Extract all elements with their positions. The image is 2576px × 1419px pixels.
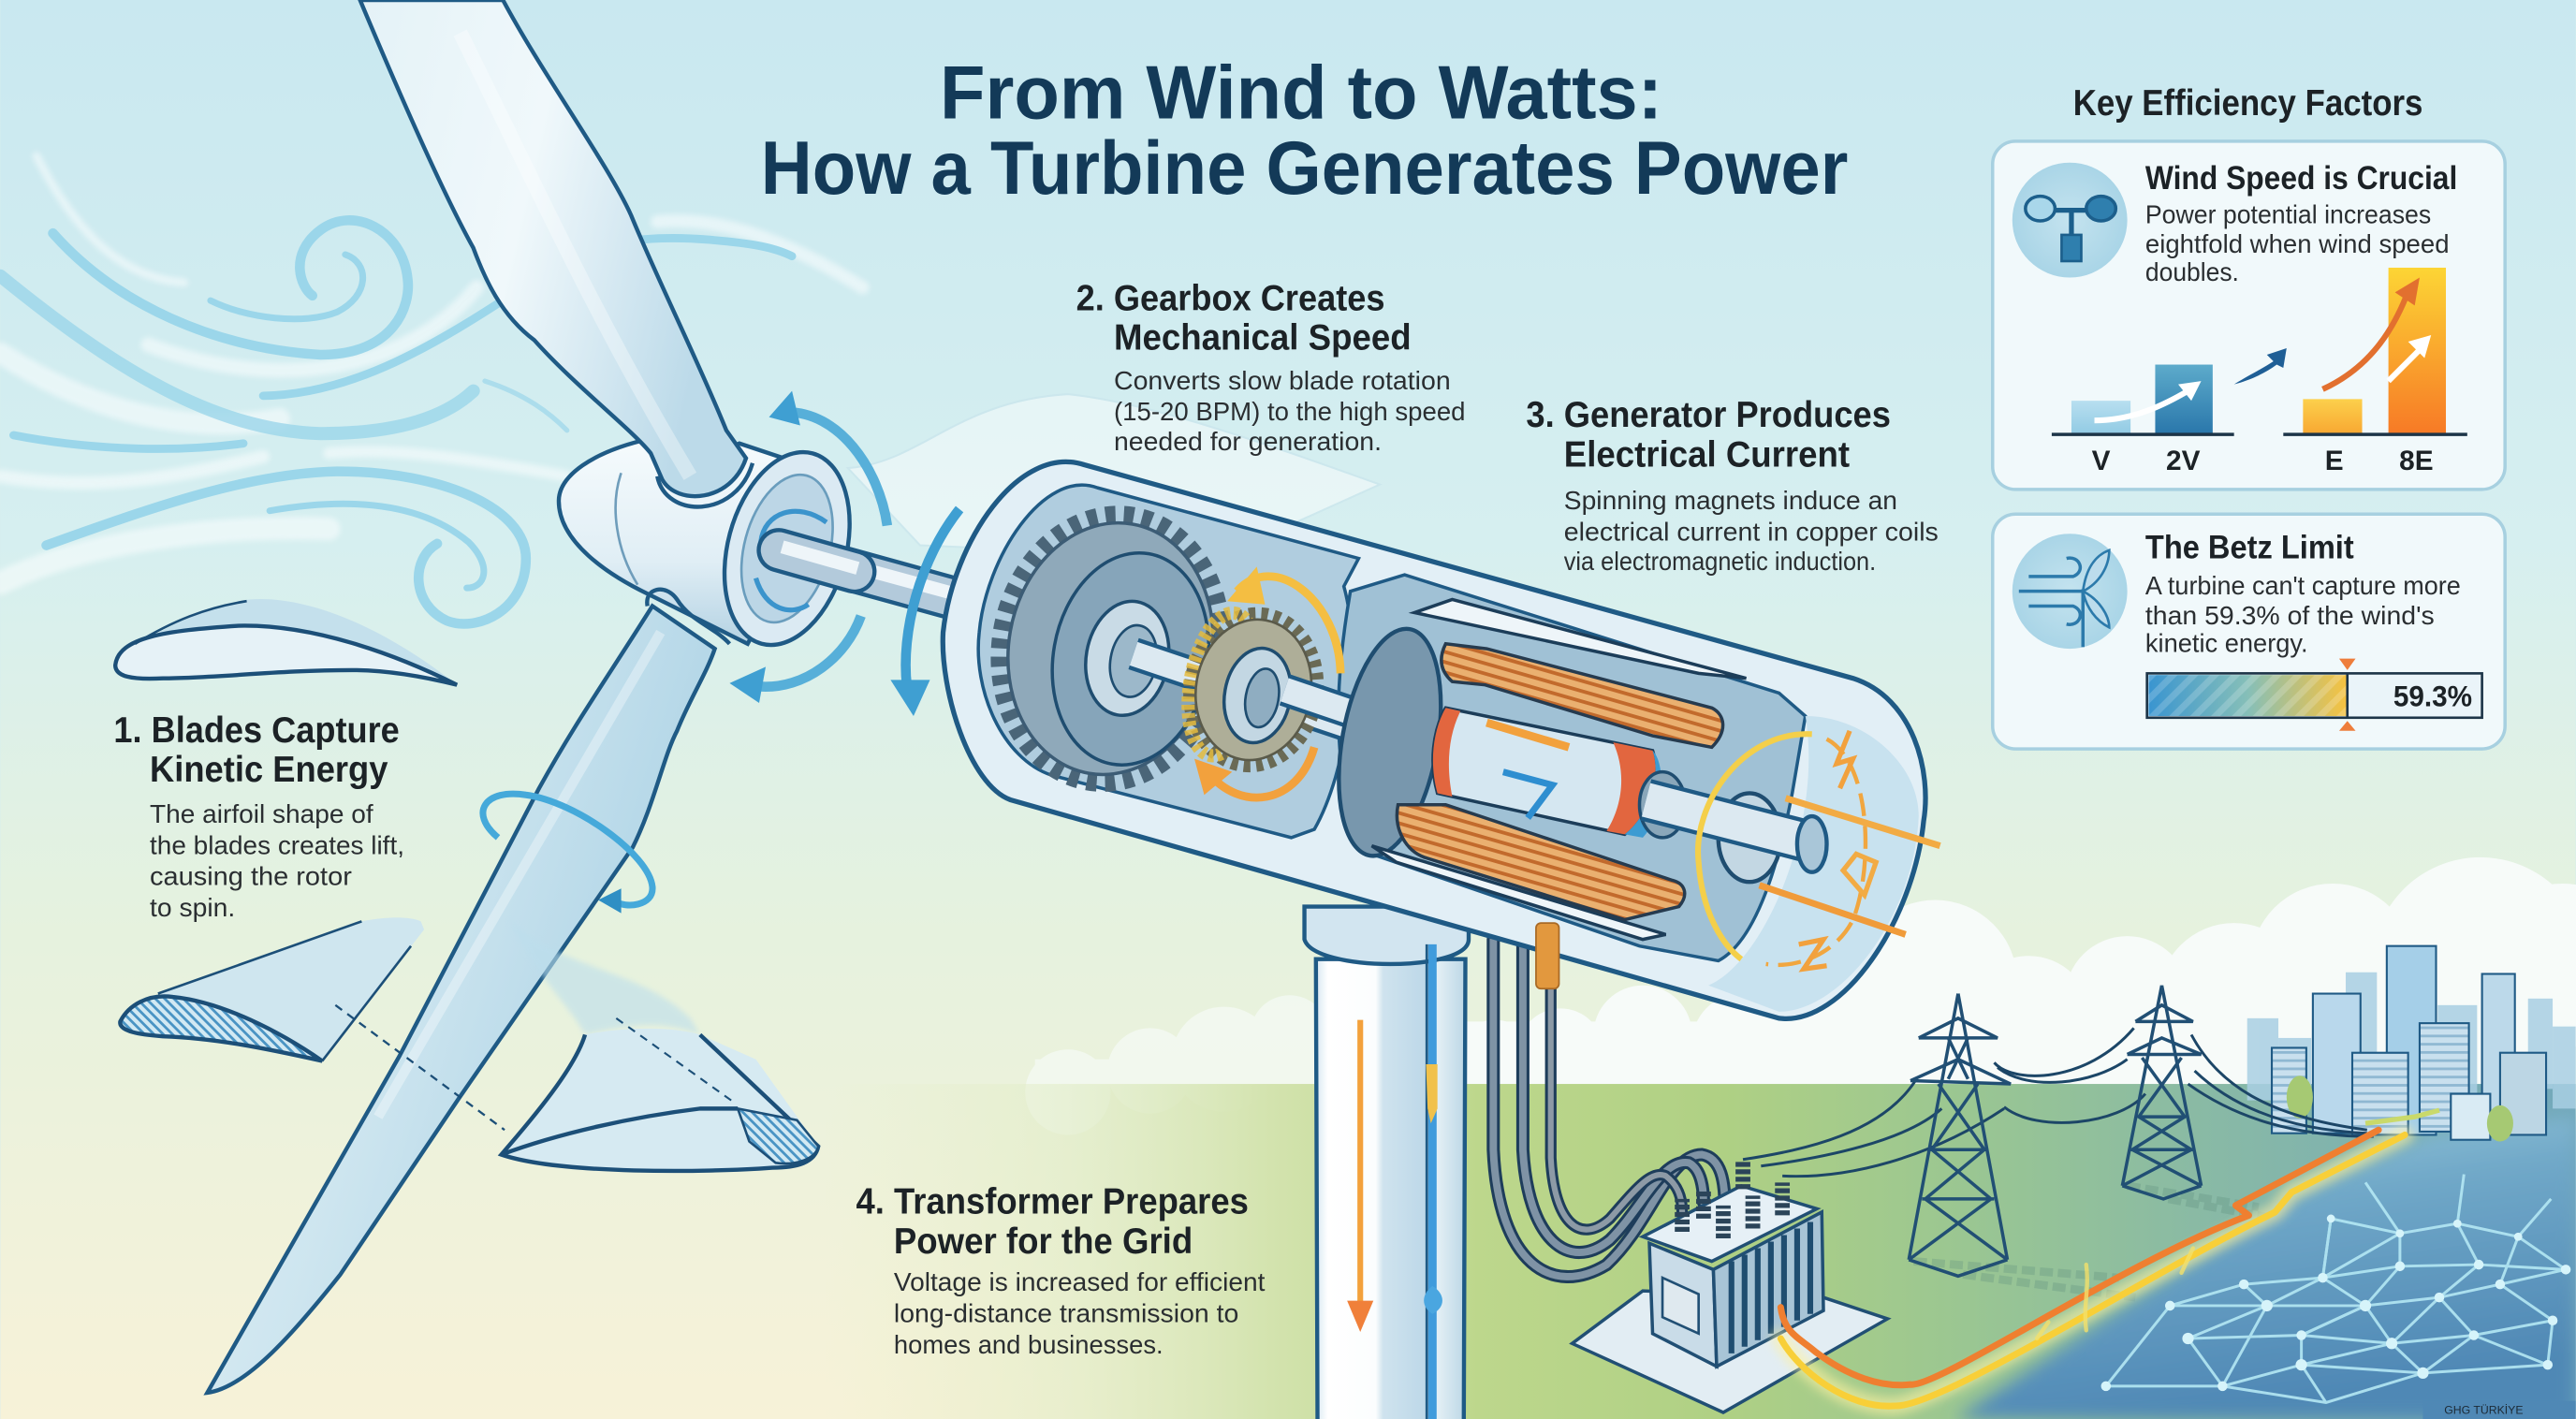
betz heading: The Betz Limit: [2145, 530, 2354, 566]
large gear: [981, 499, 1240, 798]
grid cables to transformer: [1493, 940, 1725, 1277]
rotation arrows around hub: [729, 391, 959, 716]
city skyline: [2247, 946, 2576, 1141]
small gear: [1178, 605, 1328, 775]
title: How a Turbine Generates Power: [761, 126, 1848, 211]
digital grid network: [1954, 1117, 2576, 1419]
pylon 1: [1909, 994, 2011, 1276]
blade twist arrow: [483, 794, 652, 914]
blade bottom: [207, 590, 729, 1393]
bar chart: E vs 8E: 8E: [2399, 446, 2434, 476]
wind swirls: [0, 156, 863, 623]
bar chart: E vs 8E: E: [2325, 446, 2344, 476]
pylon shadows: [1914, 1186, 2276, 1297]
title: From Wind to Watts:: [940, 51, 1662, 135]
step 4 text: Power for the Grid: [894, 1222, 1193, 1262]
bar chart: E vs 8E: [2283, 268, 2467, 476]
wind speed description: eightfold when wind speed: [2145, 229, 2450, 258]
airfoil section left: [120, 917, 424, 1061]
blade top: [360, 0, 753, 506]
faint rear blade: [848, 394, 1380, 559]
rotor: [1433, 708, 1661, 838]
wind speed description: [2145, 200, 2450, 286]
cable markers: [1424, 1064, 1442, 1314]
tower: [1305, 907, 1469, 1419]
output tap: [1536, 923, 1559, 988]
icon: anemometer: [2012, 163, 2128, 278]
step 3 text: electrical current in copper coils: [1564, 517, 1939, 546]
transformer: [1573, 1160, 1887, 1412]
main rotor shaft: [779, 547, 970, 603]
step 2 text: 2. Gearbox Creates: [1076, 279, 1385, 319]
high voltage wires: [1743, 1028, 2374, 1177]
wind speed description: Power potential increases: [2145, 200, 2431, 229]
betz progress bar: [2147, 659, 2482, 731]
step 2 text: Mechanical Speed: [1114, 318, 1412, 358]
transformer radiator face: [1713, 1212, 1823, 1367]
transformer base plate: [1573, 1291, 1887, 1412]
internal shaft: [1134, 653, 1364, 731]
bar chart: V vs 2V: 2V: [2166, 446, 2201, 476]
copper coil upper: [1442, 644, 1723, 747]
nameplate: [1662, 1278, 1699, 1334]
step 1 text: The airfoil shape of: [150, 799, 373, 828]
step 1 text: 1. Blades Capture: [113, 710, 400, 751]
induction field arcs: [1698, 731, 1940, 969]
hub flange: [705, 438, 870, 659]
step 2 text: [1076, 279, 1466, 456]
bushings: [1682, 1160, 1782, 1238]
title: [761, 51, 1848, 211]
step 3 text: 3. Generator Produces: [1526, 395, 1891, 435]
underground power line: [1780, 1130, 2405, 1406]
step 1 text: [113, 710, 404, 922]
bar chart: V vs 2V: [2052, 365, 2234, 476]
copper coil lower: [1397, 805, 1685, 920]
gearbox chamber: [978, 485, 1358, 838]
transformer front face: [1649, 1243, 1717, 1367]
panel: betz limit: [1993, 514, 2505, 749]
cable inside tower: [1427, 944, 1432, 1419]
gear rotation arrows: [1194, 566, 1340, 797]
step 4 text: homes and businesses.: [894, 1330, 1164, 1359]
step 4 text: Voltage is increased for efficient: [894, 1267, 1266, 1296]
step 3 text: [1526, 395, 1939, 576]
panel: wind speed: [1993, 141, 2505, 490]
nacelle: [943, 461, 1940, 1018]
current flow arrow: [1347, 1020, 1373, 1332]
transformer lid: [1643, 1186, 1817, 1262]
end cap glass: [1708, 716, 1919, 1012]
generator end plate: [1323, 621, 1456, 864]
step 1 text: to spin.: [150, 893, 235, 922]
step 3 text: via electromagnetic induction.: [1564, 547, 1876, 576]
output shaft: [1639, 772, 1827, 882]
stub to generator: [1284, 690, 1371, 720]
nacelle outer shell: [943, 461, 1925, 1018]
step 2 text: needed for generation.: [1114, 427, 1382, 456]
betz progress bar: 59.3%: [2393, 679, 2472, 712]
step 1 text: the blades creates lift,: [150, 830, 404, 859]
step 2 text: (15-20 BPM) to the high speed: [1114, 397, 1465, 426]
step 3 text: Spinning magnets induce an: [1564, 486, 1897, 515]
airfoil section right: [502, 920, 818, 1171]
stator bars: [1371, 599, 1747, 940]
step 4 text: [856, 1182, 1266, 1359]
step 2 text: Converts slow blade rotation: [1114, 366, 1451, 395]
bar chart: V vs 2V: V: [2092, 446, 2111, 476]
icon: wind turbine: [2012, 534, 2128, 649]
pylon 2: [2122, 986, 2202, 1199]
step 1 text: Kinetic Energy: [150, 750, 388, 790]
watermark: [2422, 1401, 2576, 1419]
step 3 text: Electrical Current: [1564, 434, 1850, 475]
wind speed description: doubles.: [2145, 257, 2239, 286]
betz description: than 59.3% of the wind's: [2145, 601, 2435, 630]
betz description: A turbine can't capture more: [2145, 571, 2461, 600]
key factors heading: Key Efficiency Factors: [2073, 83, 2422, 124]
airfoil top: [115, 599, 457, 685]
ground: [789, 1084, 2576, 1419]
tower collar: [1305, 907, 1469, 964]
wind speed heading: Wind Speed is Crucial: [2145, 160, 2457, 197]
clouds: [1025, 857, 2576, 1134]
step 4 text: 4. Transformer Prepares: [856, 1182, 1249, 1222]
step 4 text: long-distance transmission to: [894, 1298, 1238, 1327]
section dashed line: [335, 1005, 505, 1130]
watermark: GHG TÜRKİYE: [2444, 1404, 2524, 1417]
hub body: [559, 438, 838, 644]
generator chamber: [1339, 575, 1806, 960]
arrow between charts: [2234, 348, 2287, 385]
betz description: [2145, 571, 2461, 658]
step 1 text: causing the rotor: [150, 862, 352, 891]
betz description: kinetic energy.: [2145, 629, 2308, 658]
